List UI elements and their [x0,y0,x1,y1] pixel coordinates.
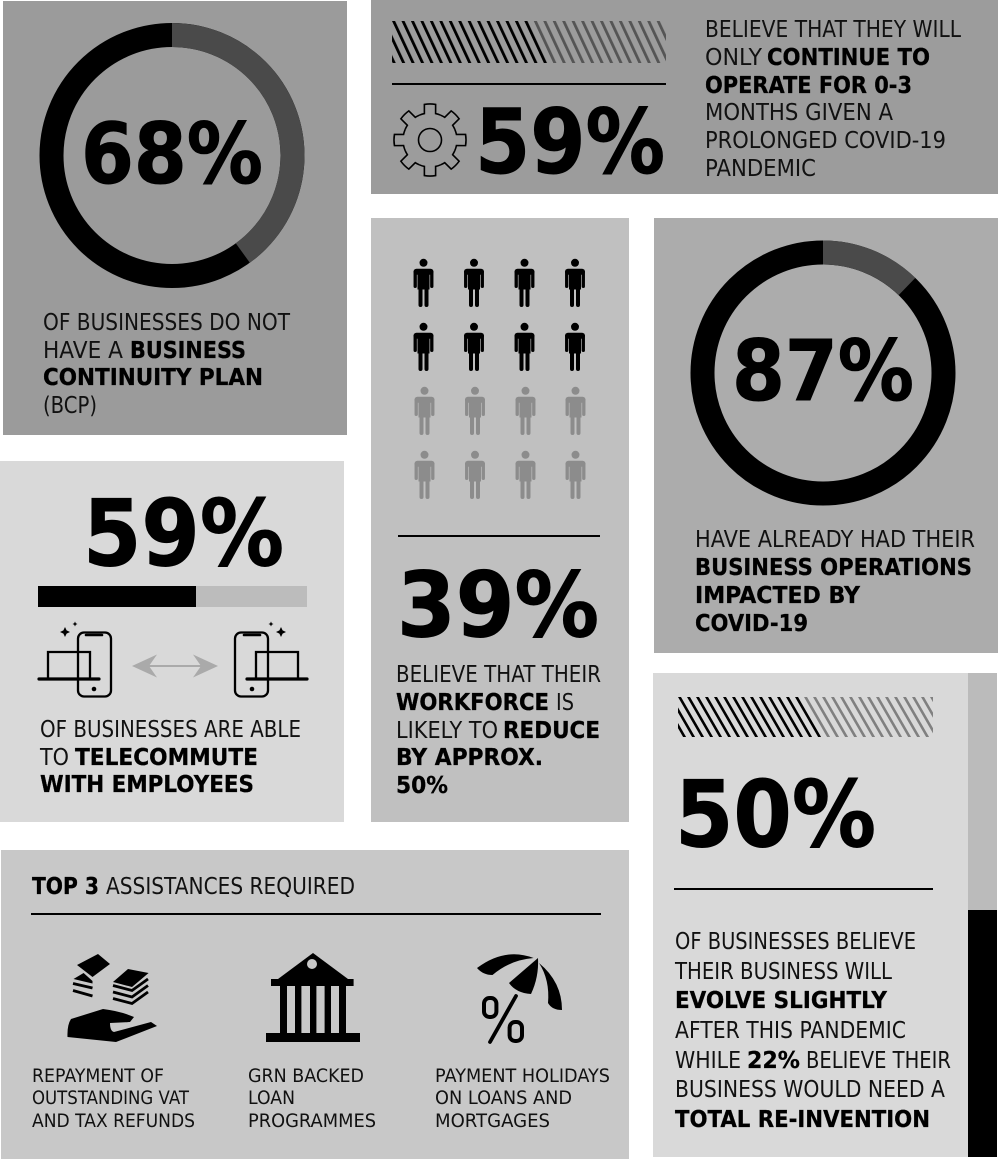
stat: 39%: 39% [397,553,599,658]
caption: payment holidays: MORTGAGES [435,1111,550,1132]
text: evolve or re-invent: BELIEVE THEIR [806,1048,951,1074]
text: evolve or re-invent: 22% [747,1048,800,1074]
icon: two-way arrow [132,654,218,678]
stat: 50%: 50% [675,761,876,868]
hatched progress bar [392,21,666,63]
text: evolve or re-invent: OF BUSINESSES BELIEVE [675,929,916,955]
text: workforce reduction: LIKELY TO [396,718,498,744]
text: operations impacted: COVID-19 [695,611,808,637]
panel: 68% no business continuity plan [3,1,347,435]
text: evolve or re-invent: WHILE [675,1048,741,1074]
stat: 59%: 59% [475,90,665,194]
text: operations impacted: IMPACTED BY [695,583,860,609]
caption: payment holidays [435,1066,610,1132]
text: workforce reduction: WORKFORCE [396,690,549,716]
icon: laptop and phone, left [39,622,111,696]
text: operations impacted [695,527,975,637]
text: business continuity plan: OF BUSINESSES DO NOT [43,310,291,336]
stat: 59%: 59% [83,480,284,587]
text: operations impacted: HAVE ALREADY HAD THEIR [695,527,975,553]
text: business continuity plan: (BCP) [43,393,97,419]
caption: loan programmes: LOAN [248,1088,295,1109]
text: evolve or re-invent: TOTAL RE-INVENTION [675,1107,930,1133]
progress bar: 59% [38,586,307,607]
text: evolve or re-invent: AFTER THIS PANDEMIC [675,1018,906,1044]
text: continue to operate: PROLONGED COVID-19 [705,128,946,154]
caption: repayment: REPAYMENT OF [32,1066,164,1087]
stat: 87%: 87% [732,322,914,420]
text: evolve or re-invent [674,929,951,1133]
caption: repayment: OUTSTANDING VAT [32,1088,190,1109]
text: operations impacted: BUSINESS OPERATIONS [695,555,972,581]
text: workforce reduction: REDUCE [503,718,600,744]
icon: gear [394,104,466,176]
text: workforce reduction [396,662,601,799]
vertical progress bar [968,673,997,1157]
panel: 59% operate for 0-3 months [371,0,998,194]
icon: umbrella with percent [477,954,562,1042]
text: telecommute: WITH EMPLOYEES [40,772,254,798]
text: evolve or re-invent: THEIR BUSINESS WILL [674,959,892,985]
caption: payment holidays: ON LOANS AND [435,1088,572,1109]
caption: payment holidays: PAYMENT HOLIDAYS [435,1066,610,1087]
text: workforce reduction: 50% [396,773,448,799]
text: workforce reduction: BELIEVE THAT THEIR [396,662,601,688]
caption: loan programmes: GRN BACKED [248,1066,364,1087]
panel: 59% telecommute [0,461,344,822]
panel: 87% operations impacted [654,218,998,653]
caption: repayment: AND TAX REFUNDS [32,1111,195,1132]
text: business continuity plan: HAVE A [43,338,123,364]
text: evolve or re-invent: EVOLVE SLIGHTLY [675,988,887,1014]
text: telecommute: TO [39,745,69,771]
stat: 68%: 68% [81,105,263,203]
heading: top 3 assistances required [32,874,355,900]
text: telecommute: TELECOMMUTE [75,745,258,771]
text: business continuity plan: CONTINUITY PLAN [43,365,263,391]
panel: top 3 assistances [1,850,629,1159]
text: continue to operate: ONLY [705,45,763,71]
donut chart: 87% [702,252,944,494]
text: continue to operate: OPERATE FOR 0-3 [705,73,912,99]
panel: 39% workforce reduction [371,218,629,822]
text: continue to operate: MONTHS GIVEN A [705,100,893,126]
pictogram: 16 people, 8 highlighted [414,259,586,497]
panel: 50% evolve slightly [653,673,997,1157]
text: continue to operate: PANDEMIC [705,156,816,182]
heading: top 3 assistances required: ASSISTANCES REQUIRED [106,874,355,900]
icon: hand with money [67,954,157,1042]
hatched progress bar [678,697,933,737]
text: telecommute: OF BUSINESSES ARE ABLE [40,717,301,743]
text: business continuity plan [43,310,291,419]
text: workforce reduction: BY APPROX. [396,745,543,771]
text: continue to operate: BELIEVE THAT THEY WILL [705,17,961,43]
icon: laptop and phone, right [235,622,307,696]
text: continue to operate: CONTINUE TO [767,45,930,71]
icon: bank [266,953,360,1042]
caption: repayment [32,1066,195,1132]
caption: loan programmes [248,1066,376,1132]
donut chart: 68% [52,35,292,276]
text: evolve or re-invent: BUSINESS WOULD NEED A [675,1077,945,1103]
caption: loan programmes: PROGRAMMES [248,1111,376,1132]
heading: top 3 assistances required: TOP 3 [32,874,99,900]
text: business continuity plan: BUSINESS [130,338,246,364]
text: telecommute [39,717,301,798]
text: continue to operate [705,17,961,182]
text: workforce reduction: IS [556,690,574,716]
